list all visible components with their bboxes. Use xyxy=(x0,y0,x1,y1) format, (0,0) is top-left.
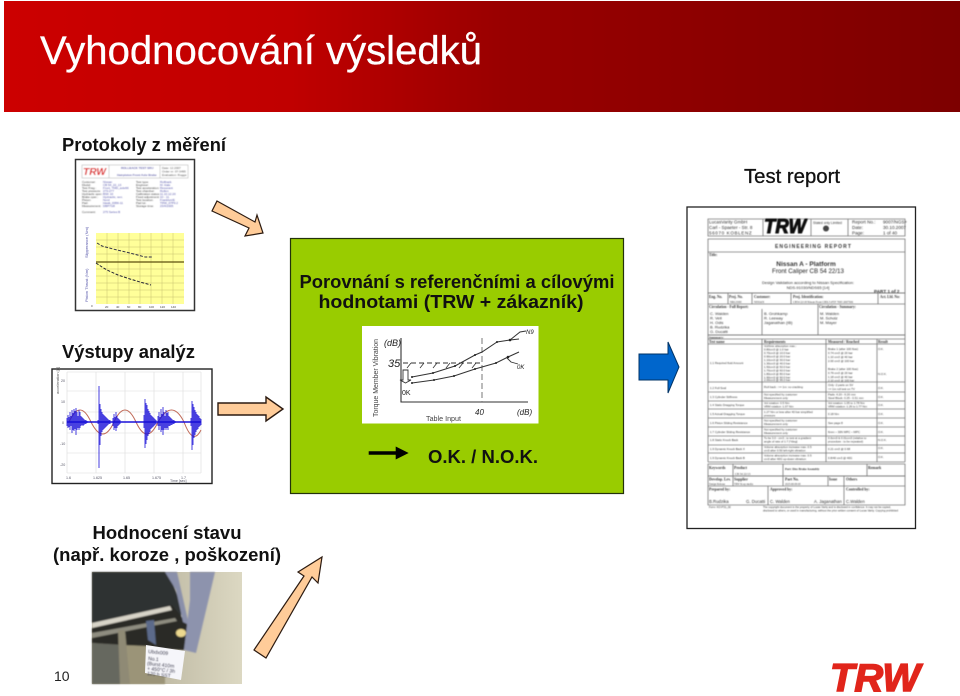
panel heading xyxy=(300,272,614,312)
heading: condition assessment: (např. koroze , poškození) xyxy=(53,545,281,565)
panel: engineering test report document xyxy=(53,207,923,696)
chart: residual torque curves: 80 xyxy=(138,305,142,309)
panel: roll test report thumbnail: M. Hale xyxy=(160,183,171,187)
panel: roll test report thumbnail: Front, TMD_axle66 xyxy=(103,186,129,190)
chart: vibration vs table input sketch: 35 xyxy=(388,358,401,370)
panel: engineering test report document: Circulation - Summary: xyxy=(819,305,856,309)
panel: engineering test report document: G. Ducatti xyxy=(746,499,765,504)
panel: engineering test report document: Result xyxy=(878,340,889,344)
chart: vibration vs table input sketch: Table Input xyxy=(426,416,461,423)
panel: engineering test report document: Supplier xyxy=(734,478,748,482)
chart: vibration vs table input sketch: 0K xyxy=(517,365,525,371)
panel: engineering test report document: M. Mayer xyxy=(820,320,837,325)
panel: engineering test report document: Requirements xyxy=(764,340,786,344)
panel: engineering test report document: O.K. xyxy=(878,347,884,351)
panel: engineering test report document: C. Walden xyxy=(770,499,791,504)
panel: engineering test report document: 0.90cm3 @ 20.0 bar xyxy=(764,354,790,358)
panel: roll test report thumbnail: Measurement: xyxy=(82,204,101,208)
panel: engineering test report document: Title: xyxy=(709,253,717,257)
panel: roll test report thumbnail: Model: xyxy=(82,183,91,187)
chart: residual torque curves: Slipperance (Nm) xyxy=(84,226,89,258)
panel: engineering test report document: 1 of 40 xyxy=(883,230,897,236)
panel heading: Porovnání s referenčními a cílovými xyxy=(300,272,614,292)
panel: engineering test report document: 1.8 Static Knock Back xyxy=(710,438,739,442)
panel: engineering test report document: pressure xyxy=(764,414,776,418)
panel: engineering test report document: Issue xyxy=(829,478,838,482)
panel: engineering test report document: procedure : to be repeated) xyxy=(828,440,863,444)
panel: roll test report thumbnail: TRW_07P9.2 xyxy=(160,201,178,205)
panel: roll test report thumbnail: Rollback xyxy=(160,180,172,184)
panel: engineering test report document: Measured / Reached xyxy=(828,340,859,344)
panel: roll test report thumbnail: Rollen xyxy=(160,189,169,193)
panel: engineering test report document: TRW Koop media xyxy=(734,483,754,486)
photo label xyxy=(145,645,185,680)
arrow: comparison to test report xyxy=(639,342,679,393)
chart: vibration waveform: 1.7 xyxy=(181,476,186,480)
photo label: No.1 xyxy=(148,656,159,663)
panel: engineering test report document: 1.90cm3 @ 90.0 bar xyxy=(764,376,790,380)
chart: vibration waveform: 20 xyxy=(61,379,65,383)
panel: engineering test report document: N.O.K. xyxy=(878,372,887,376)
panel: engineering test report document: Vol rotation: 1.05 to 1.78 Nm xyxy=(828,401,865,405)
panel: engineering test report document: 1.9 Dynamic Knock Back X xyxy=(710,447,745,451)
heading: analysis outputs: Výstupy analýz xyxy=(62,342,195,362)
chart: vibration vs table input sketch: (dB) xyxy=(517,408,532,417)
panel: engineering test report document: Pads: 4.20 - 6.20 mm xyxy=(828,392,856,396)
arrow: analysis to comparison xyxy=(218,397,283,421)
panel: roll test report thumbnail: Frankfurt/E xyxy=(160,198,175,202)
panel: roll test report thumbnail: Test type: xyxy=(136,180,149,184)
panel: engineering test report document: VRM rotation: 1.26 to 1.77 Nm xyxy=(828,404,868,408)
chart: residual torque curves: 60 xyxy=(127,305,131,309)
chart: vibration vs table input sketch: 40 xyxy=(475,408,484,417)
panel: engineering test report document: The copyright document is the property of Lucas Varity and is disclosed in confidence. It may not be copied, xyxy=(763,505,891,509)
panel heading: hodnotami (TRW + zákazník) xyxy=(318,292,584,312)
panel: roll test report thumbnail: 275 Series B xyxy=(103,210,120,214)
panel: engineering test report document: Circulation - Full Report: xyxy=(709,305,749,309)
panel: engineering test report document: 0.74 cm3 @ 20 bar xyxy=(828,351,853,355)
panel: roll test report thumbnail: Hairpiston Front Axle Brake xyxy=(117,173,157,177)
panel: roll test report thumbnail: Order nr: 07-3495 xyxy=(162,170,186,174)
panel: engineering test report document: O.K. xyxy=(878,421,884,425)
panel: engineering test report document: Part: Disc Brake Assembly xyxy=(785,467,820,471)
panel: roll test report thumbnail: Storage time: xyxy=(136,204,154,208)
panel: engineering test report document: Summary: xyxy=(709,336,724,340)
panel: engineering test report document: O.K. xyxy=(878,386,884,390)
panel: roll test report thumbnail: Test location: xyxy=(136,198,154,202)
panel: engineering test report document: Eng. No. xyxy=(709,295,722,299)
panel: engineering test report document: O.K. xyxy=(878,395,884,399)
panel: engineering test report document: R. Veit xyxy=(710,316,723,320)
panel: engineering test report document: Test name xyxy=(709,340,725,344)
panel: engineering test report document: Volume absorption increase max. 0.5 xyxy=(764,454,812,458)
title banner xyxy=(4,1,960,112)
panel: engineering test report document: cm3 after 0.50 left-right vibration xyxy=(764,448,806,452)
panel: roll test report thumbnail: Test Frag.: xyxy=(82,186,96,190)
panel: engineering test report document: 1.70cm3 @ 60.0 bar xyxy=(764,368,790,372)
chart: vibration waveform: 1.675 xyxy=(152,476,161,480)
panel: roll test report thumbnail: CB 54_22_13 xyxy=(103,183,122,187)
panel: engineering test report document: H. Odis xyxy=(710,320,723,325)
panel: engineering test report document: 0.18 Nm xyxy=(828,412,840,416)
heading: test report: Test report xyxy=(744,166,840,188)
panel: engineering test report document: Steel Block: 0.25 - 0.31 mm xyxy=(828,396,864,400)
panel: roll test report thumbnail xyxy=(76,160,194,310)
panel: engineering test report document: 2.00 cm3 @ 100 bar xyxy=(828,359,854,363)
panel: roll test report thumbnail: Evaluation: Rogge xyxy=(162,173,187,177)
panel: roll test report thumbnail: TRW xyxy=(83,167,108,178)
chart: vibration waveform: 1.6 xyxy=(66,476,71,480)
panel: engineering test report document: 2025-60-09-00 xyxy=(785,483,801,486)
panel: engineering test report document: 2.00cm3 @ 96.0 bar xyxy=(764,378,790,382)
panel: roll test report thumbnail: Fixed adjustment: xyxy=(136,195,160,199)
panel: engineering test report document: Not specified by customer xyxy=(764,428,797,432)
panel: engineering test report document: 30.10.2007 xyxy=(883,225,906,230)
panel: comparison with targets xyxy=(290,238,624,494)
photo: corroded brake component xyxy=(92,572,242,684)
panel: engineering test report document: >= 1m roll test on TV xyxy=(828,387,855,391)
panel: engineering test report document: O.K. xyxy=(878,403,884,407)
panel: engineering test report document: Keywords xyxy=(709,466,726,470)
panel: engineering test report document: 56070 KOBLENZ xyxy=(709,230,752,236)
panel: roll test report thumbnail: Test chamber: xyxy=(136,189,155,193)
chart: vibration vs table input sketch: N9 xyxy=(526,330,534,336)
chart: vibration waveform: 10 xyxy=(61,400,65,404)
panel: roll test report thumbnail: BSK 10 xyxy=(103,192,114,196)
panel: engineering test report document: cm3 after 40G up-down vibration xyxy=(764,457,806,461)
panel: engineering test report document: Develop. Lev. xyxy=(709,478,731,482)
panel: engineering test report document: Act. Lbl. No: xyxy=(880,295,900,299)
panel: engineering test report document: 1.27 Nm or less after 40 bar simplified xyxy=(764,410,813,414)
result label: O.K. / N.O.K. xyxy=(428,447,538,467)
chart: residual torque curves: 0 xyxy=(91,304,93,308)
panel: engineering test report document: Prepared by: xyxy=(709,488,730,492)
panel: roll test report thumbnail: Pad lot: xyxy=(136,201,146,205)
panel: engineering test report document: B. Grohkamp xyxy=(764,311,788,316)
panel: engineering test report document: Page: xyxy=(852,230,864,236)
panel: engineering test report document: Not specified by customer xyxy=(764,392,797,396)
panel: engineering test report document: 1.4 Static Dragging Torque xyxy=(710,403,745,407)
panel: roll test report thumbnail: Nissan xyxy=(103,180,113,184)
panel: engineering test report document: Part No. xyxy=(785,478,799,482)
panel: engineering test report document: 1.1 Required fluid Amount xyxy=(710,361,743,365)
panel: engineering test report document: 9007/NGS+ xyxy=(883,220,907,224)
panel: engineering test report document: Design Validation according to Nissan Specification: xyxy=(762,280,854,285)
panel: roll test report thumbnail: Customer: xyxy=(82,180,96,184)
panel: roll test report thumbnail: 270-277 xyxy=(103,189,114,193)
panel: engineering test report document: G. Ducatti xyxy=(710,329,728,334)
panel: engineering test report document: Remark xyxy=(868,466,882,470)
panel: engineering test report document: 1.18 cm3 @ 40 bar xyxy=(828,375,853,379)
panel: engineering test report document: 1.80cm3 @ 80.0 bar xyxy=(764,372,790,376)
panel: engineering test report document: O.K. xyxy=(878,430,884,434)
panel: engineering test report document: Approved by: xyxy=(770,488,792,492)
panel: engineering test report document: 1.50cm3 @ 50.0 bar xyxy=(764,365,790,369)
panel: engineering test report document: C. Walden xyxy=(710,311,729,316)
chart: vibration waveform: 1.65 xyxy=(123,476,130,480)
panel: engineering test report document: 1.10 cm3 @ 40 bar xyxy=(828,355,853,359)
panel: engineering test report document: 0.79 cm3 @ 20 bar xyxy=(828,371,853,375)
panel: engineering test report document: CB54 22/18 Nissan Front CBX-5-PTF 7095 2007506 xyxy=(793,301,854,304)
panel: engineering test report document: Brake 1 (after 100 flow) xyxy=(828,347,858,351)
panel: engineering test report document: C.Walden xyxy=(846,499,865,504)
panel: engineering test report document: NISSAN xyxy=(754,301,764,304)
panel: roll test report thumbnail: 23/4/2005 xyxy=(160,204,174,208)
panel: engineering test report document: Vol rotation: 0.5 Nm xyxy=(764,401,790,405)
panel: engineering test report document: 1.10cm3 @ 30.0 bar xyxy=(764,358,790,362)
panel: roll test report thumbnail: Piston: xyxy=(82,198,91,202)
panel: engineering test report document: R. Leeway xyxy=(764,316,783,320)
chart: vibration waveform: 1.625 xyxy=(93,476,102,480)
panel: engineering test report document: disclosed to others, or used in manufacturing, without the prior written consent of Lucas Varity. Copying prohibited xyxy=(763,508,898,512)
heading: condition assessment xyxy=(53,523,281,565)
panel: engineering test report document: NDS-91030/NDS65 [14] xyxy=(787,285,829,290)
chart: vibration waveform: -20 xyxy=(60,463,65,467)
panel: engineering test report document: 1.2 Full Seal xyxy=(710,386,726,390)
chart: residual torque curves: 120 xyxy=(160,305,165,309)
photo label: 120 h SST xyxy=(147,671,171,679)
chart: vibration waveform xyxy=(52,367,212,484)
heading: condition assessment: Hodnocení stavu xyxy=(92,523,242,543)
panel: engineering test report document: Others xyxy=(846,478,858,482)
panel: engineering test report document: 1.9 Dynamic Knock Back B xyxy=(710,456,745,460)
panel: roll test report thumbnail: Pad: xyxy=(82,201,88,205)
panel: roll test report thumbnail: Date: 12.2007 xyxy=(162,166,181,170)
panel: engineering test report document: Proj. No. xyxy=(729,295,743,299)
page number: 10 xyxy=(54,668,70,684)
chart: residual torque curves: 100 xyxy=(149,305,154,309)
panel: roll test report thumbnail: Hawk_6956-11 xyxy=(103,201,123,205)
panel: engineering test report document: Roll back : >= 1m: no cracking xyxy=(764,385,803,389)
panel: roll test report thumbnail: ROLLBACK TEST SRU xyxy=(121,166,154,170)
panel: engineering test report document: 1.5 Actual Dragging Torque xyxy=(710,412,745,416)
chart: vibration vs table input sketch: 0K xyxy=(402,390,411,397)
panel: engineering test report document: 0.80cm3 @ 1.0 bar xyxy=(764,348,789,352)
panel: engineering test report document: 0.21 cm3 @ 0.68 xyxy=(828,447,850,451)
photo label: Ubdx009 xyxy=(148,649,169,657)
chart: vibration vs table input sketch: Torque Member Vibration xyxy=(371,339,380,417)
panel: engineering test report document: Stated only Limited xyxy=(813,221,842,225)
panel: engineering test report document: Form: KO-P31_02 xyxy=(709,505,731,509)
panel: engineering test report document: ENGINEERING REPORT xyxy=(775,244,852,250)
panel: engineering test report document: B. Rudzika xyxy=(710,324,730,330)
panel: engineering test report document: 1.3 Cylinder Stiffness xyxy=(710,395,738,399)
panel: engineering test report document: 0.8/40 cm3 @ 40G xyxy=(828,456,853,460)
chart: vibration waveform: -10 xyxy=(60,442,65,446)
panel: engineering test report document: A. Jaganathan xyxy=(814,499,842,504)
panel: roll test report thumbnail: Test acceleration: xyxy=(136,186,160,190)
panel: engineering test report document: Proj. Identification: xyxy=(793,295,823,299)
panel: engineering test report document: Customer: xyxy=(754,295,770,299)
panel: roll test report thumbnail: Calibration status: xyxy=(136,192,160,196)
chart: residual torque curves: Piston Thrust (Nm) xyxy=(84,268,89,302)
panel: engineering test report document: Design Release xyxy=(709,483,726,486)
title: Vyhodnocování výsledků xyxy=(40,29,482,73)
chart: vibration waveform: 0 xyxy=(62,421,64,425)
panel: engineering test report document: Only -2 parts on SV xyxy=(828,383,853,387)
panel: roll test report thumbnail: Hydraulic, sen. xyxy=(103,195,123,199)
arrow: condition assessment to test report xyxy=(254,557,322,658)
chart: vibration vs table input sketch xyxy=(362,326,538,424)
panel: engineering test report document: Carl - Spaeter - Str. 8 xyxy=(709,225,753,230)
panel: engineering test report document: B.Rudzika xyxy=(709,499,729,504)
panel: roll test report thumbnail: Test pressure: xyxy=(82,189,101,193)
panel: engineering test report document: 1.7 Cylinder Sliding Resistance xyxy=(710,430,750,434)
panel: engineering test report document: 1.6 Piston Sliding Resistance xyxy=(710,421,748,425)
panel: engineering test report document: Date: xyxy=(852,225,863,230)
chart: residual torque curves: 140 xyxy=(171,305,176,309)
panel: engineering test report document: N.O.K. xyxy=(878,438,887,442)
photo label: (Burst 410m xyxy=(147,661,175,670)
chart: vibration waveform: acceleration [g] xyxy=(55,367,60,394)
panel: roll test report thumbnail: Engineer: xyxy=(136,183,149,187)
panel: engineering test report document: M. Walden xyxy=(820,311,839,316)
panel: engineering test report document: PART 1 of 2 xyxy=(874,289,900,294)
panel: engineering test report document: See page 8 xyxy=(828,421,843,425)
panel: engineering test report document: O.K. xyxy=(878,412,884,416)
logo: TRW in report header: TRW xyxy=(764,216,808,238)
panel: engineering test report document: CB 54 22/13 xyxy=(735,472,751,476)
panel: engineering test report document: 0.70cm3 @ 10.0 bar xyxy=(764,351,790,355)
panel: engineering test report document: M. Scholz xyxy=(820,316,838,320)
panel: roll test report thumbnail: DBP7G8 xyxy=(103,204,115,208)
panel: roll test report thumbnail: Hydraulic oper.: xyxy=(82,192,103,196)
panel: engineering test report document: Vol/time absorption max.: xyxy=(764,344,797,348)
panel: roll test report thumbnail: Resonant xyxy=(160,186,173,190)
panel: engineering test report document: Jaganathan (IB) xyxy=(764,320,793,325)
panel: engineering test report document: LucasVarity GmbH xyxy=(709,220,747,224)
photo label: + 450°C / 3h xyxy=(147,666,175,675)
panel: engineering test report document: NRG3300 xyxy=(730,301,742,304)
panel: engineering test report document: Product xyxy=(734,466,748,470)
panel: engineering test report document: 0.0cm3 & 0.01cm3 (relative to xyxy=(828,436,867,440)
chart: vibration vs table input sketch: (dB) xyxy=(384,338,401,348)
panel: engineering test report document: angle of rate of 1.7 [°/deg] xyxy=(764,440,797,444)
panel: engineering test report document: Front Caliper CB 54 22/13 xyxy=(772,268,844,275)
panel: engineering test report document: O.K. xyxy=(878,446,884,450)
panel: engineering test report document: 1.30cm3 @ 40.0 bar xyxy=(764,362,790,366)
panel: roll test report thumbnail: Nord xyxy=(103,198,110,202)
panel: engineering test report document: Measurement only xyxy=(764,422,788,426)
panel: roll test report thumbnail: Brake oper.: xyxy=(82,195,98,199)
arrow: result xyxy=(369,447,408,459)
panel: roll test report thumbnail: 11.10.12.20 xyxy=(160,192,176,196)
panel: engineering test report document: Nissan A - Platform xyxy=(776,261,836,268)
heading: measurement protocols: Protokoly z měření xyxy=(62,135,227,155)
arrow: protocol to comparison xyxy=(212,201,263,236)
panel: engineering test report document: Volume absorption increase max. 0.5 xyxy=(764,445,812,449)
panel: engineering test report document: Report No.: xyxy=(852,220,876,224)
chart: residual torque curves: 20 xyxy=(105,305,109,309)
panel: engineering test report document: 6mm ~ 30N MPC ~ MPC xyxy=(828,430,860,434)
chart: residual torque curves: 40 xyxy=(116,305,120,309)
panel: engineering test report document: Controlled by: xyxy=(846,488,870,492)
panel: engineering test report document: VRM rotation: 1.07 Nm xyxy=(764,404,794,408)
panel: engineering test report document: Not specified by customer xyxy=(764,418,797,422)
panel: engineering test report document: To be 3.0 - cm3 ; to test at a gradient xyxy=(764,436,811,440)
chart: vibration waveform: Time [sec] xyxy=(170,479,186,483)
panel: engineering test report document: Measurement only xyxy=(764,431,788,435)
panel: engineering test report document: Brake 2 (after 100 flow) xyxy=(828,367,858,371)
panel: engineering test report document: O.K. xyxy=(878,455,884,459)
panel: roll test report thumbnail: 10 - 11 xyxy=(160,195,169,199)
panel: roll test report thumbnail: Comment: xyxy=(82,210,96,214)
panel: engineering test report document: Measurement only xyxy=(764,396,788,400)
chart: residual torque curves xyxy=(84,226,184,309)
panel: engineering test report document: 2.10 cm3 @ 100 bar xyxy=(828,378,854,382)
